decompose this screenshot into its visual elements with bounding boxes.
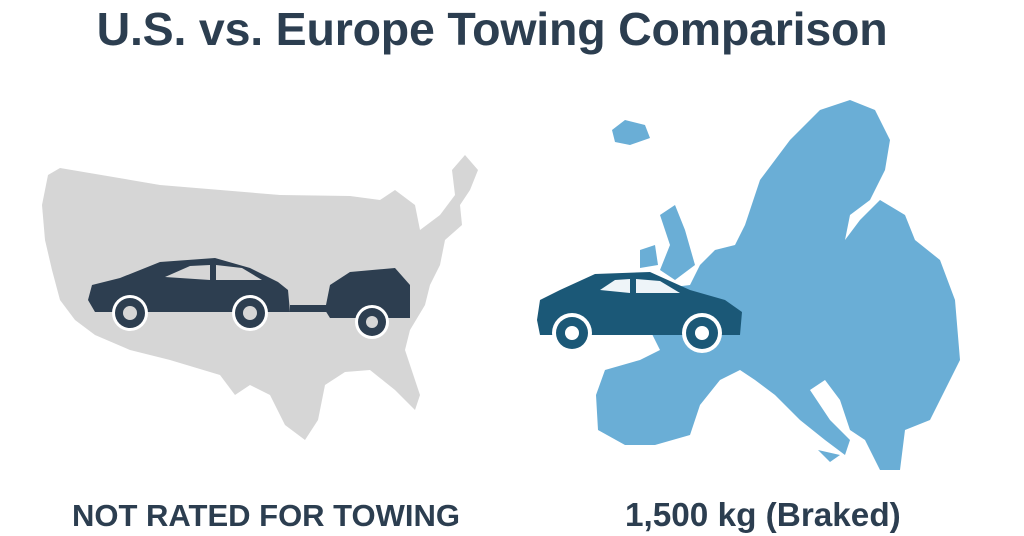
map: europe <box>596 100 960 470</box>
label: europe: 1,500 kg (Braked) <box>625 497 901 534</box>
map: united states <box>42 155 478 440</box>
title: U.S. vs. Europe Towing Comparison <box>97 3 887 55</box>
icon: dark car towing trailer <box>88 258 410 339</box>
icon: blue car <box>537 272 742 353</box>
label: us: NOT RATED FOR TOWING <box>72 498 460 533</box>
